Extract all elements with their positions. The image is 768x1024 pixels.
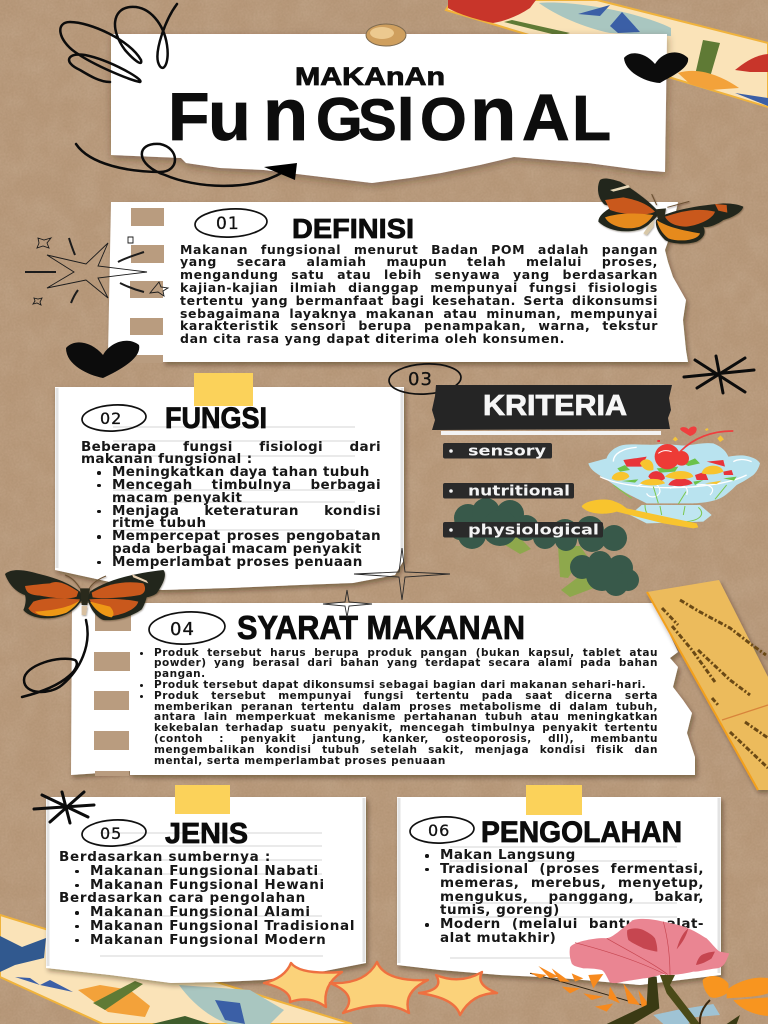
doodle: heart top right <box>624 52 688 83</box>
punched holes <box>94 600 131 776</box>
badge 01 <box>194 207 268 239</box>
definisi body text: dan cita rasa yang dapat diterima oleh konsumen. <box>180 331 565 346</box>
badge 03 <box>388 362 462 396</box>
title: fungsional: L <box>572 82 611 154</box>
syarat body text <box>134 648 658 770</box>
label: physiological <box>443 522 603 538</box>
ruled lines <box>48 798 364 966</box>
label: nutritional <box>443 483 574 500</box>
definisi body text <box>160 244 658 349</box>
heading: kriteria: KRITERIA <box>483 390 627 422</box>
fungsi body text: pada berbagai macam penyakit <box>112 541 362 557</box>
fungsi body text: Meningkatkan daya tahan tubuh <box>112 464 370 480</box>
syarat body text: pangan. <box>154 668 206 680</box>
doodle: butterfly tail swirl <box>22 620 88 697</box>
badge 03: 03 <box>408 369 433 390</box>
definisi body text: tertentu yang bermanfaat bagi kesehatan. Serta dikonsumsi <box>180 293 658 308</box>
floral tape: top right <box>446 0 768 107</box>
title: fungsional: O <box>420 86 467 153</box>
jenis body text: Makanan Fungsional Modern <box>90 932 326 948</box>
pengolahan body text: alat mutakhir) <box>440 930 556 946</box>
sticky tape <box>175 785 230 814</box>
badge 05 <box>81 818 147 848</box>
syarat body text: mental, serta memperlambat proses penuaan <box>154 755 446 767</box>
badge 04 <box>148 610 226 646</box>
label: sensory: sensory <box>468 444 546 460</box>
jenis body text: Berdasarkan cara pengolahan <box>59 890 306 906</box>
kriteria banner <box>432 385 672 430</box>
pengolahan body text <box>420 849 704 949</box>
fungsi body text: Mempercepat proses pengobatan <box>112 528 381 544</box>
doodle: scribble top left <box>60 4 177 82</box>
fungsi body text <box>61 441 381 571</box>
syarat body text: kekebalan terhadap suatu penyakit, mencegah timbulnya penyakit tertentu <box>154 722 658 734</box>
pengolahan body text: tumis, goreng) <box>440 902 560 918</box>
badge 06: 06 <box>428 821 450 840</box>
fungsi body text: makanan fungsional : <box>81 451 252 467</box>
fungsi body text: macam penyakit <box>112 490 242 506</box>
panel: title card <box>111 34 667 183</box>
pin <box>366 24 406 46</box>
label: sensory <box>443 443 552 460</box>
definisi body text: sebagaimana layaknya makanan atau minuman, mempunyai <box>180 306 658 321</box>
title: fungsional: u <box>208 77 251 155</box>
badge 01: 01 <box>216 214 240 234</box>
doodle: star cluster <box>25 237 168 305</box>
badge 04: 04 <box>170 619 195 640</box>
butterfly: left <box>5 570 165 620</box>
syarat body text: mengembalikan kondisi tubuh setelah sakit, menjaga kondisi fisik dan <box>154 744 658 756</box>
label: nutritional: nutritional <box>468 484 570 500</box>
title: fungsional: n <box>470 72 516 157</box>
fungsi body text: ritme tubuh <box>112 515 206 531</box>
jenis body text: Makanan Fungsional Alami <box>90 904 311 920</box>
icon: fruit salad bowl <box>582 427 760 528</box>
jenis body text: Makanan Fungsional Hewani <box>90 877 325 893</box>
doodle: heart left <box>66 341 139 378</box>
title: fungsional: F <box>168 79 210 155</box>
heading: definisi: DEFINISI <box>292 213 414 244</box>
panel: fungsi note <box>55 373 404 590</box>
title: fungsional: G <box>316 86 363 153</box>
title: fungsional: S <box>358 88 397 153</box>
jenis body text <box>39 851 364 951</box>
syarat body text: Produk tersebut dapat dikonsumsi sebagai bagian dari makanan sehari-hari. <box>154 679 646 691</box>
flower illustration: bottom right <box>530 919 768 1024</box>
title: fungsional: A <box>522 80 570 154</box>
panel: pengolahan note <box>397 785 721 985</box>
panel: jenis note <box>39 785 366 983</box>
yellow handwriting tape <box>647 580 768 790</box>
definisi body text: kajian-kajian ilmiah dianggap mempunyai fungsi fisiologis <box>180 280 658 295</box>
syarat body text: memberikan peranan tertentu dalam proses metabolisme di dalam tubuh, <box>154 701 658 713</box>
heading: jenis: JENIS <box>165 818 248 850</box>
label: physiological: physiological <box>468 522 599 538</box>
definisi body text: yang secara alamiah maupun telah melalui proses, <box>180 254 658 269</box>
floral tape: bottom left <box>0 915 352 1024</box>
fungsi body text: Memperlambat proses penuaan <box>112 554 363 570</box>
panel: syarat makanan card <box>71 600 695 776</box>
heading: syarat makanan: SYARAT MAKANAN <box>237 609 525 646</box>
pengolahan body text: Tradisional (proses fermentasi, <box>440 861 704 877</box>
banner highlight <box>441 431 661 435</box>
sticky tape <box>194 373 253 406</box>
broccoli illustration <box>450 498 639 597</box>
panel: kriteria <box>388 362 672 435</box>
fungsi body text: Menjaga keteraturan kondisi <box>112 503 381 519</box>
syarat body text: antara lain memperkuat mekanisme pertahanan tubuh atau meningkatkan <box>154 711 658 723</box>
ruled lines <box>57 388 402 568</box>
heading: fungsi: FUNGSI <box>165 402 267 435</box>
sticky tape <box>526 785 582 815</box>
badge 06 <box>409 815 475 845</box>
heading: pengolahan: PENGOLAHAN <box>481 816 682 849</box>
jenis body text: Makanan Fungsional Nabati <box>90 863 319 879</box>
panel: definisi card <box>108 202 688 363</box>
badge 02 <box>81 403 147 433</box>
butterfly: top right <box>598 178 743 244</box>
pengolahan body text: memeras, merebus, menyetup, <box>440 875 704 891</box>
syarat body text: Produk tersebut mempunyai fungsi tertentu pada saat dicerna serta <box>154 690 658 702</box>
syarat body text: powder) yang berasal dari bahan yang terdapat secara alami pada bahan <box>154 657 658 669</box>
title: makanan: MAKAnAn <box>295 63 445 91</box>
definisi body text: mengandung satu atau lebih senyawa yang berdasarkan <box>180 267 658 282</box>
doodle: swirl arrow <box>76 144 297 186</box>
jenis body text: Makanan Fungsional Tradisional <box>90 918 355 934</box>
ruled lines <box>399 798 719 973</box>
doodle: sparkle stars <box>323 548 450 617</box>
title: fungsional: n <box>263 73 308 156</box>
pengolahan body text: Modern (melalui bantuan alat- <box>440 916 704 932</box>
definisi body text: karakteristik sensori berupa penampakan, warna, tekstur <box>180 318 658 333</box>
badge 05: 05 <box>100 824 122 843</box>
icon: three orange stars <box>264 962 497 1015</box>
punched holes <box>130 208 164 363</box>
title: fungsional: I <box>397 85 414 154</box>
fungsi body text: Mencegah timbulnya berbagai <box>112 477 381 493</box>
pengolahan body text: mengukus, panggang, bakar, <box>440 889 704 905</box>
doodle: asterisk left <box>34 792 94 823</box>
doodle: asterisk right <box>684 356 754 393</box>
badge 02: 02 <box>100 409 122 428</box>
syarat body text: (contoh : penyakit jantung, kanker, osteoporosis, dll), membantu <box>154 733 658 745</box>
